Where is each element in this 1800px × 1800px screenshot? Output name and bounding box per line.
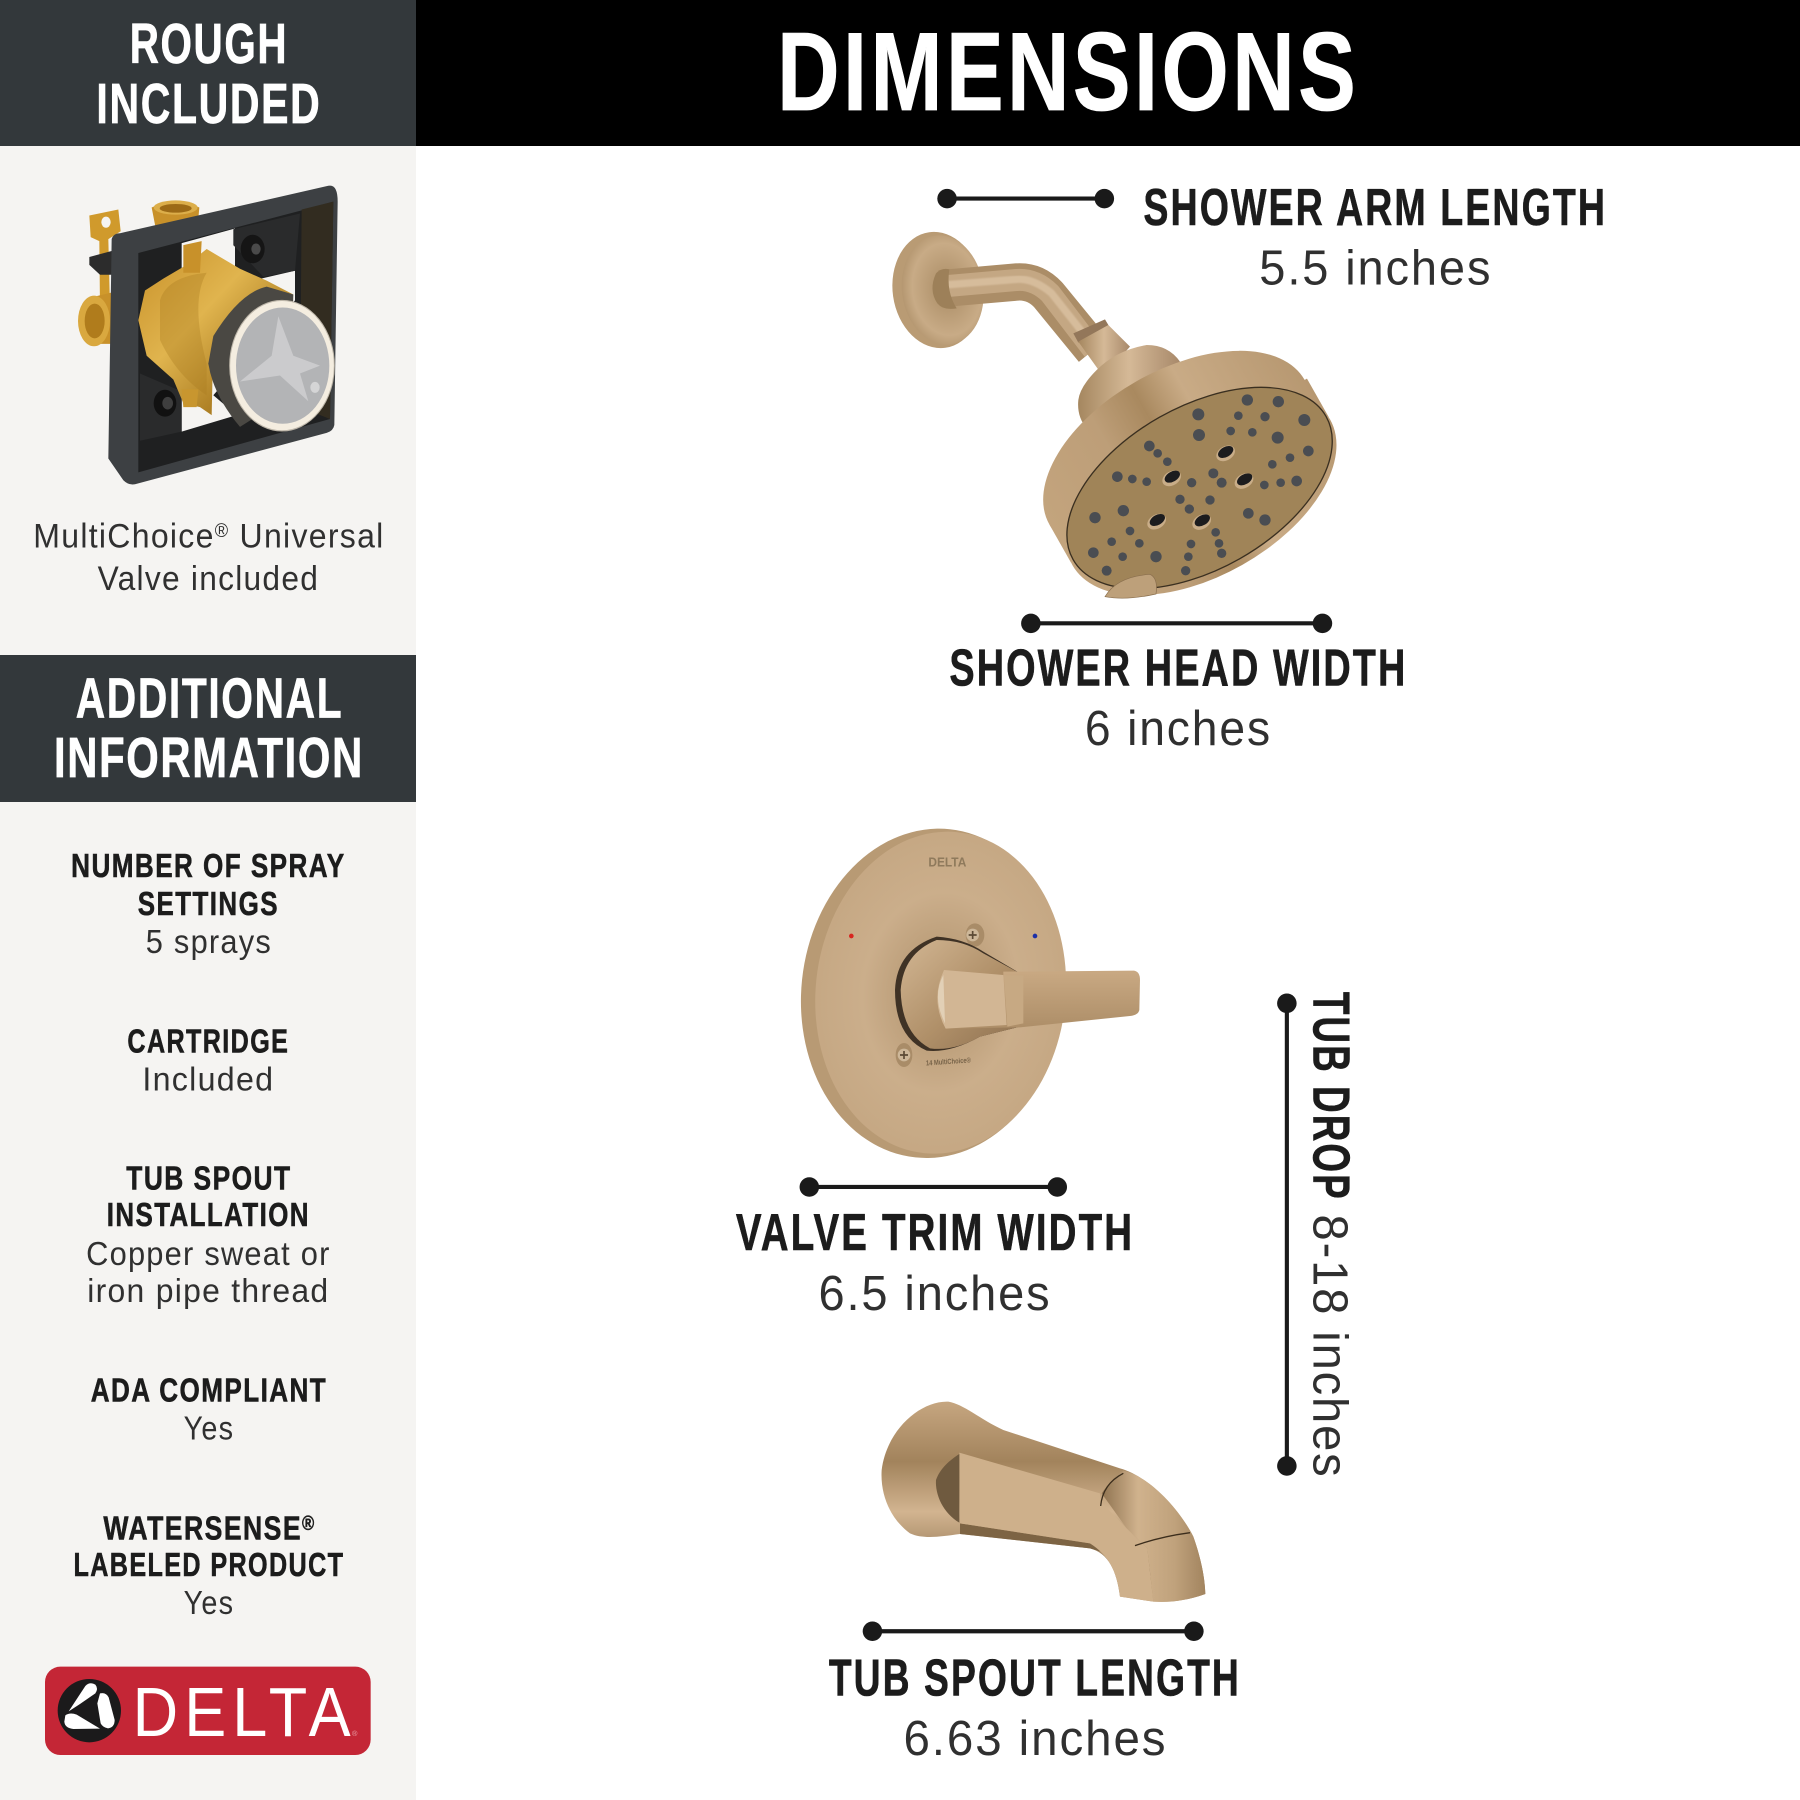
collar [1078,345,1180,428]
info: tub spout installation: TUB SPOUT [126,1160,292,1197]
text: multichoice valve caption: Valve included [98,560,319,598]
label: shower arm length [1143,178,1607,296]
spout underside shadow [960,1523,1107,1553]
spout recess [936,1454,959,1523]
valve plaster guard [236,308,329,424]
label: tub drop [1302,992,1360,1479]
info: watersense labeled product: LABELED PRODUCT [73,1547,344,1584]
label: tub spout length: 6.63 inches [903,1711,1167,1766]
info: watersense labeled product: ® [302,1512,316,1535]
logo: delta [45,1667,371,1755]
shower head and arm product [885,226,1371,638]
mounting tab [89,210,121,308]
info: ada compliant: ADA COMPLIANT [91,1373,327,1410]
info: tub spout installation [86,1160,331,1310]
label: tub drop: TUB DROP [1302,992,1360,1201]
engraved multichoice text: 14 MultiChoice® [926,1055,972,1068]
frame outer [108,186,338,484]
info: number of spray settings: NUMBER OF SPRAY [71,848,346,885]
top pipe [152,202,199,257]
info: ada compliant [91,1373,327,1448]
handle lever front [937,970,1007,1029]
valve front ring [230,300,334,431]
heading banner: additional information: INFORMATION [54,726,364,789]
logo: delta: DELTA [133,1673,357,1751]
arm threads and escutcheon ring [932,269,1109,343]
label: shower arm length: 5.5 inches [1259,241,1492,296]
info: watersense labeled product: Yes [184,1585,234,1622]
info: tub spout installation: Copper sweat or [86,1236,331,1273]
dimension line: tub drop [1277,994,1297,1476]
tub spout product [882,1402,1205,1602]
trim face [799,819,1082,1166]
handle hub [895,937,1020,1051]
frame inner wall [138,202,333,472]
spout flat panel [959,1453,1153,1602]
info: tub spout installation: iron pipe thread [87,1273,329,1310]
heading banner: rough included [0,0,416,146]
info: number of spray settings: SETTINGS [138,886,279,923]
info: watersense labeled product [73,1510,344,1622]
label: valve trim width: VALVE TRIM WIDTH [736,1203,1134,1261]
label: tub drop: 8-18 inches [1302,1215,1357,1479]
spout tip [1102,1471,1205,1602]
heading banner: additional information [0,655,416,802]
spout seams [1101,1473,1190,1546]
selector tab [1105,574,1157,598]
cold indicator [1033,934,1037,938]
spray nozzles [1088,394,1314,576]
info: cartridge [127,1024,289,1099]
label: tub spout length: TUB SPOUT LENGTH [829,1649,1241,1707]
center jets [1145,442,1256,533]
label: valve trim width: 6.5 inches [818,1266,1052,1321]
valve trim and handle product [785,816,1140,1171]
heading: DIMENSIONS: DIMENSIONS [777,9,1359,134]
title banner: dimensions [416,0,1800,146]
logo: delta: ® [352,1729,358,1738]
connector [1078,325,1130,377]
heading banner: rough included: ROUGH [130,12,288,75]
left pipe [87,293,112,344]
info: ada compliant: Yes [184,1411,234,1448]
label: shower head width: 6 inches [1085,701,1272,756]
text: multichoice valve caption: MultiChoice [33,518,228,556]
info: cartridge: CARTRIDGE [127,1024,289,1061]
info: number of spray settings: 5 sprays [146,924,272,961]
info: tub spout installation: INSTALLATION [107,1197,310,1234]
chrome sleeve [208,287,293,427]
heading banner: additional information: ADDITIONAL [76,666,343,729]
icon: rough-in valve product [78,186,338,484]
dimension line: shower arm length [937,189,1114,208]
label: shower head width: SHOWER HEAD WIDTH [949,638,1407,696]
icon: delta triangle mark [58,1679,121,1742]
dimension line: valve trim width [800,1177,1067,1197]
info: number of spray settings [71,848,346,961]
text: multichoice valve caption: Universal [229,518,385,556]
text: multichoice valve caption: ® [215,520,229,542]
dimension line: tub spout length [863,1621,1204,1641]
head rim and face [1009,308,1371,638]
dimension line: shower head width [1021,614,1332,633]
shower arm [940,279,1095,350]
frame openings [182,228,295,432]
handle lever [947,971,1140,1029]
label: tub spout length [829,1649,1241,1766]
face [1033,346,1366,630]
info: cartridge: Included [142,1062,274,1099]
spout body [882,1402,1205,1602]
flange [885,226,991,354]
info: watersense labeled product: WATERSENSE [103,1510,352,1547]
text: multichoice valve caption [33,518,385,598]
label: shower head width [949,638,1407,756]
hot indicator [849,934,854,938]
upper screw [233,213,300,277]
heading banner: rough included: INCLUDED [96,72,321,135]
top screw [966,923,984,947]
brass valve body [138,249,293,415]
label: valve trim width [736,1203,1134,1321]
lower screw [140,374,182,441]
trim rim [785,816,1081,1171]
bottom screw [896,1043,912,1067]
sidebar background panel [0,146,416,1800]
engraved delta text: DELTA [928,855,967,870]
label: shower arm length: SHOWER ARM LENGTH [1143,178,1607,236]
